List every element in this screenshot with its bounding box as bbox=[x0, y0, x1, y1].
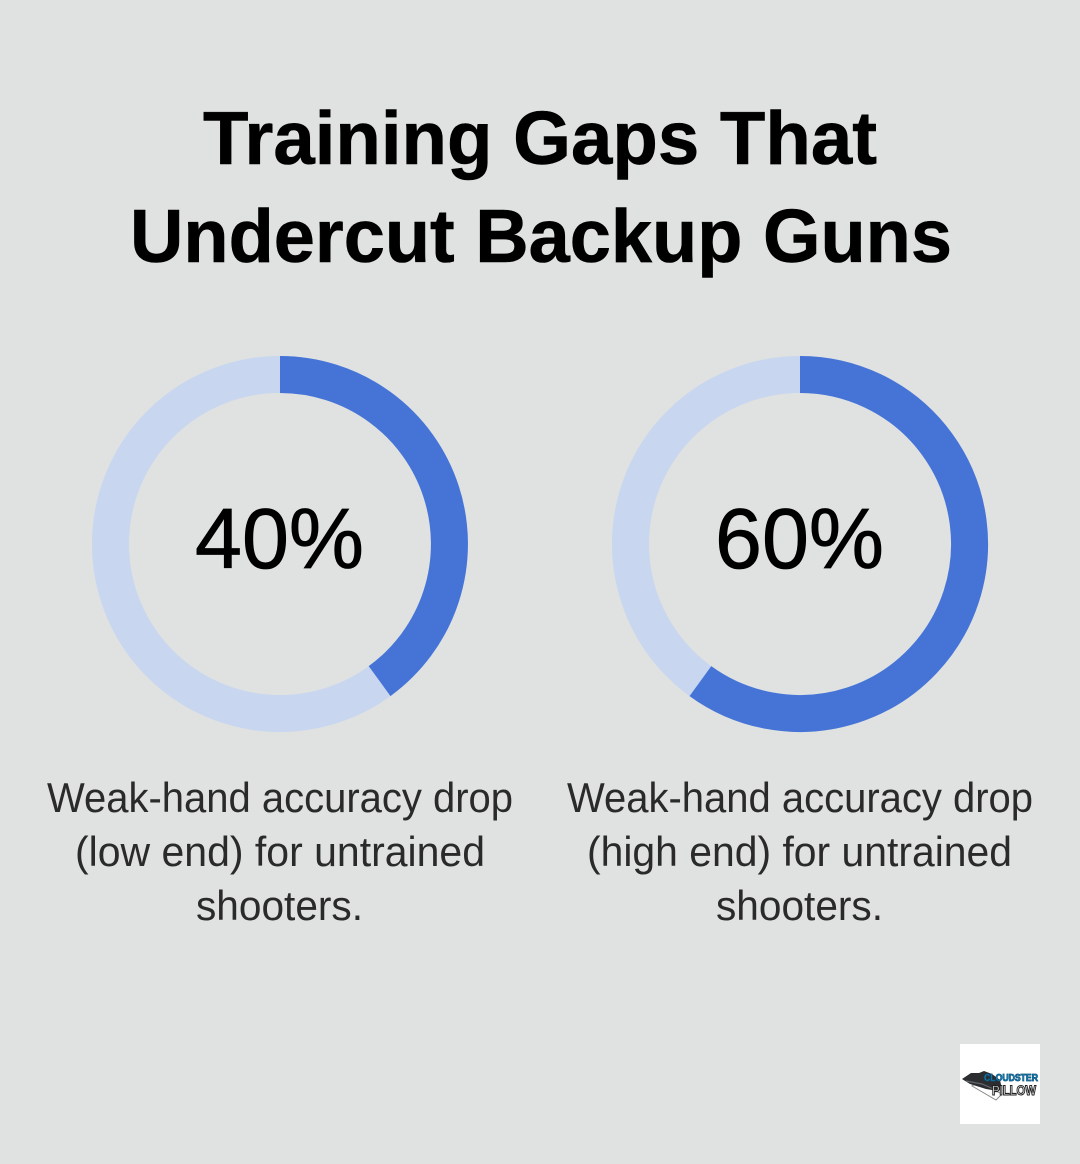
logo: Cloudster Pillow bbox=[960, 1044, 1040, 1124]
donut chart: 40% bbox=[110, 374, 450, 714]
logo wordmark: PILLOW bbox=[992, 1082, 1037, 1098]
logo wordmark bbox=[984, 1073, 1039, 1098]
title: Training Gaps That bbox=[203, 96, 877, 180]
value: 60%: 60% bbox=[715, 492, 884, 587]
description: high end: Weak-hand accuracy drop bbox=[567, 774, 1033, 821]
logo wordmark: CLOUDSTER bbox=[984, 1073, 1039, 1084]
description: high end bbox=[567, 774, 1033, 929]
description: low end: shooters. bbox=[196, 882, 363, 929]
description: high end: (high end) for untrained bbox=[587, 828, 1012, 875]
donut chart: 60% bbox=[630, 374, 970, 714]
icon: pillow bbox=[962, 1071, 1002, 1100]
description: low end: Weak-hand accuracy drop bbox=[47, 774, 513, 821]
description: low end bbox=[47, 774, 513, 929]
value: 40%: 40% bbox=[195, 492, 364, 587]
title: Undercut Backup Guns bbox=[130, 194, 952, 278]
description: low end: (low end) for untrained bbox=[75, 828, 485, 875]
description: high end: shooters. bbox=[716, 882, 883, 929]
panel: high-end accuracy drop bbox=[567, 374, 1033, 929]
title bbox=[130, 96, 952, 278]
panel: low-end accuracy drop bbox=[47, 374, 513, 929]
